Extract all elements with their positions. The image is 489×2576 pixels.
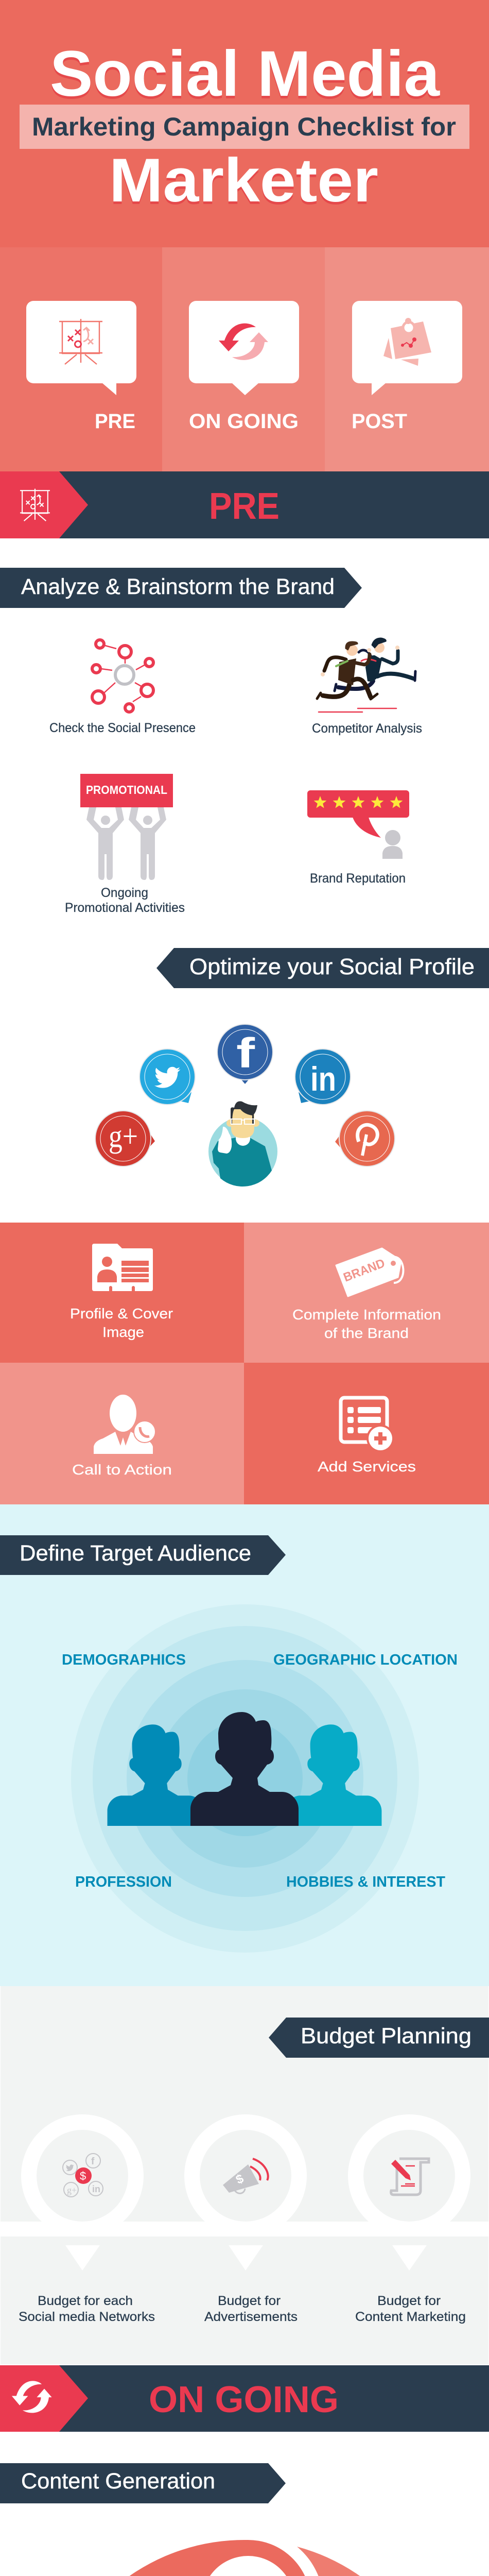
icon: document with pencil: [391, 2159, 429, 2195]
icon: networks with dollar: in: [92, 2184, 100, 2194]
icon: contact person with phone: [94, 1395, 155, 1454]
heading: Define Target Audience: [0, 1535, 286, 1575]
heading: Content Generation: [0, 2463, 286, 2503]
icon: networks with dollar: g+: [67, 2185, 77, 2195]
budget item: advertisements: [204, 2159, 298, 2324]
band: PRE: [0, 471, 489, 538]
icon: profile card: [92, 1244, 153, 1291]
icon: network: [92, 640, 153, 712]
icon: refresh arrows: [219, 324, 268, 360]
icon: refresh arrows white: [12, 2381, 52, 2413]
icon: facebook bubble: f: [236, 1030, 255, 1077]
panel: header: [0, 0, 489, 247]
band: ON GOING: [0, 2365, 489, 2432]
icon: megaphone with dollar: $: [234, 2172, 246, 2187]
band: PRE: PRE: [209, 486, 280, 527]
panel: content generation: [0, 2463, 446, 2576]
panel: budget planning: [0, 1986, 489, 2364]
tile: profile and cover image: Image: [102, 1324, 144, 1340]
item: brand reputation: [307, 790, 409, 886]
timeline band with rings: [0, 2114, 489, 2270]
heading: Analyze & Brainstorm the Brand: [0, 568, 362, 608]
label: profession: PROFESSION: [75, 1874, 172, 1890]
phase: ON GOING: ON GOING: [189, 410, 299, 433]
heading: Optimize your Social Profile: [156, 948, 489, 988]
segment: content relevancy: [276, 2547, 446, 2576]
budget item: social networks: Budget for each: [38, 2294, 133, 2308]
budget item: social networks: [19, 2154, 155, 2324]
item: brand reputation: Brand Reputation: [310, 871, 406, 886]
title: Marketer: Marketer: [109, 146, 378, 215]
label: hobbies and interest: HOBBIES & INTEREST: [286, 1874, 445, 1890]
icon: audience silhouettes: [108, 1712, 381, 1826]
chart: concentric audience rings: [71, 1604, 419, 1953]
icon: pinterest bubble: [335, 1111, 395, 1166]
heading: Budget Planning: Budget Planning: [301, 2024, 471, 2048]
heading: Define Target Audience: Define Target Audience: [20, 1541, 251, 1566]
icon: strategy board white: [20, 489, 50, 521]
item: social presence: Check the Social Presence: [49, 721, 196, 735]
icon: networks with dollar: f: [91, 2156, 95, 2167]
icon: megaphone with dollar: [223, 2159, 268, 2193]
heading: Budget Planning: [269, 2018, 489, 2058]
chart: swirl diagram: [44, 2540, 446, 2576]
icon: people holding promotional sign: PROMOTIONAL: [86, 783, 167, 796]
subtitle banner: Marketing Campaign Checklist for: [32, 112, 456, 141]
tile: complete brand information: of the Brand: [324, 1325, 409, 1341]
tile: profile and cover image: Profile & Cover: [70, 1306, 173, 1321]
icon: twitter bubble: [139, 1049, 195, 1105]
panel: profile checklist grid: [0, 1223, 489, 1504]
icon: google plus bubble: g+: [109, 1119, 138, 1154]
phase: POST: POST: [352, 410, 407, 433]
panel: analyze and brainstorm: [0, 568, 422, 915]
budget item: advertisements: Advertisements: [204, 2310, 298, 2324]
phase: PRE: PRE: [95, 410, 135, 433]
icon: running businessmen: [317, 638, 415, 712]
item: promotional activities: Ongoing: [101, 886, 148, 900]
band: ON GOING: ON GOING: [149, 2379, 339, 2420]
icon: brand tag: BRAND: [341, 1256, 387, 1285]
tile: complete brand information: Complete Information: [292, 1307, 441, 1323]
icon: pinned note: [383, 318, 431, 366]
icon: networks with dollar: [63, 2154, 103, 2197]
tile: call to action: [0, 1363, 244, 1504]
heading: Content Generation: Content Generation: [21, 2469, 215, 2494]
item: promotional activities: Promotional Activities: [65, 901, 185, 915]
heading: Optimize your Social Profile: Optimize your Social Profile: [189, 954, 475, 979]
icon: linkedin bubble: [295, 1049, 351, 1105]
item: promotional activities: [65, 774, 185, 915]
item: social presence: [49, 640, 196, 735]
icon: list with plus: [341, 1398, 394, 1452]
budget item: advertisements: Budget for: [218, 2294, 281, 2308]
icon: brand tag: [336, 1248, 403, 1296]
icon: linkedin bubble: in: [310, 1060, 336, 1098]
panel: optimize social profile: [95, 948, 489, 1187]
icon: facebook bubble: [217, 1024, 273, 1084]
budget item: content marketing: [355, 2159, 466, 2324]
title: Social Media: Social Media: [50, 38, 440, 110]
icon: google plus bubble: [95, 1111, 155, 1166]
tile: add services: [244, 1363, 489, 1504]
tile: profile and cover image: [0, 1223, 244, 1363]
budget item: content marketing: Budget for: [377, 2294, 441, 2308]
label: demographics: DEMOGRAPHICS: [62, 1652, 186, 1668]
segment: personalized content: [50, 2540, 311, 2576]
phase: POST: [352, 301, 462, 433]
illustration: man with thumbs up: [208, 1101, 277, 1187]
phase: PRE: [26, 301, 136, 433]
icon: people holding promotional sign: [80, 774, 173, 880]
heading: Analyze & Brainstorm the Brand: Analyze & Brainstorm the Brand: [21, 574, 335, 599]
subtitle banner: [20, 105, 469, 149]
tile: complete brand information: [244, 1223, 489, 1363]
icon: strategy board: [59, 319, 102, 364]
tile: call to action: Call to Action: [72, 1462, 172, 1478]
panel: define target audience: [0, 1504, 489, 1986]
item: competitor analysis: Competitor Analysis: [312, 721, 422, 736]
tile: add services: Add Services: [318, 1459, 416, 1475]
icon: networks with dollar: $: [80, 2170, 86, 2182]
panel: three phases: [0, 247, 489, 471]
budget item: content marketing: Content Marketing: [355, 2310, 466, 2324]
icon: star rating: [307, 790, 409, 859]
item: competitor analysis: [312, 638, 422, 736]
phase: ON GOING: [189, 301, 299, 433]
label: geographic location: GEOGRAPHIC LOCATION: [273, 1652, 458, 1668]
budget item: social networks: Social media Networks: [19, 2310, 155, 2324]
